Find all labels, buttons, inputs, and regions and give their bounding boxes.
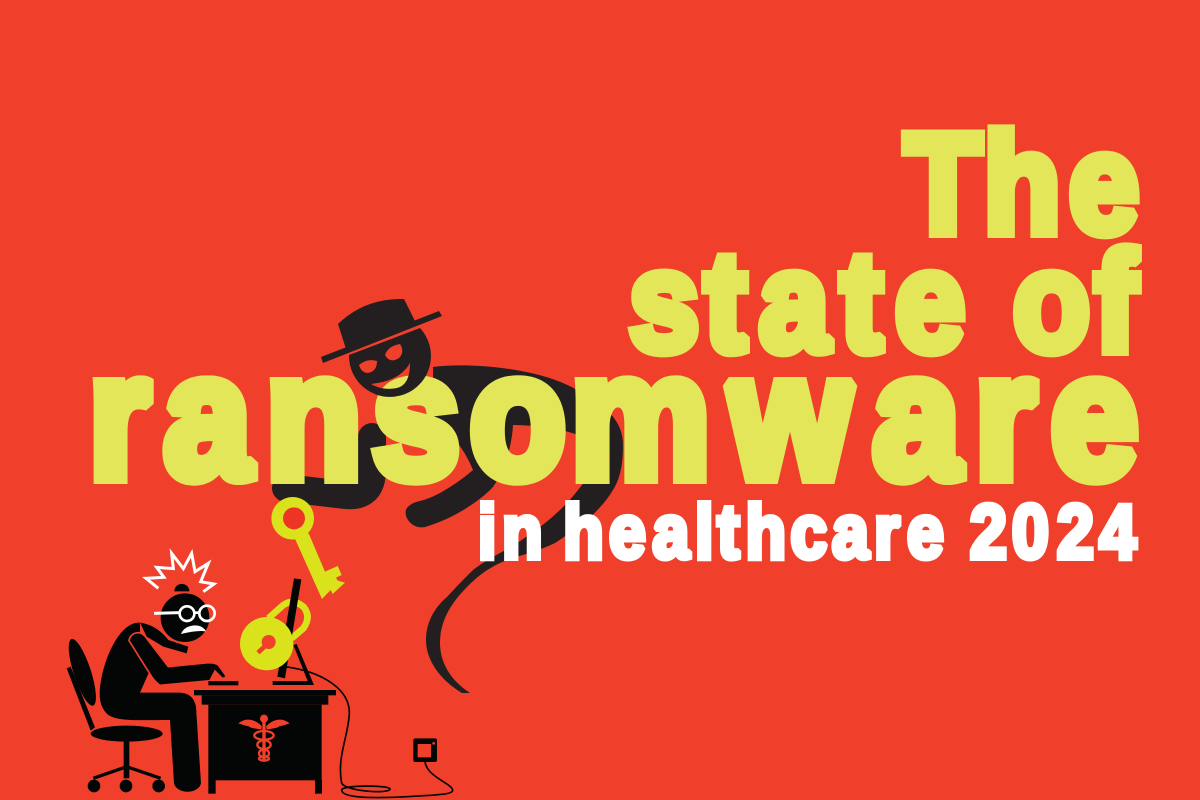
wall socket <box>413 738 437 762</box>
heading line: ransomware: ransomware <box>89 319 1138 515</box>
keyboard <box>208 681 238 685</box>
office worker scene <box>63 497 453 798</box>
title <box>89 105 1139 575</box>
thief head and hat <box>321 299 442 397</box>
arm with red outline <box>129 633 227 685</box>
head with bun <box>160 584 210 643</box>
hat brim <box>321 311 442 363</box>
glasses <box>154 606 215 621</box>
power cable <box>285 667 453 798</box>
frightened mouth <box>181 625 206 634</box>
computer monitor <box>273 578 314 685</box>
padlock shackle <box>268 602 307 638</box>
heading line: The: The <box>905 105 1139 263</box>
office chair <box>63 636 165 792</box>
medical caduceus emblem <box>238 715 290 761</box>
shock burst <box>146 553 214 592</box>
head with mask eyes and grin cut out <box>349 328 431 397</box>
subheading: in healthcare 2024: in healthcare 2024 <box>478 491 1136 575</box>
desk <box>194 690 336 794</box>
heading line: state of: state of <box>629 223 1137 381</box>
worker body <box>100 623 227 792</box>
key <box>271 497 345 599</box>
scarf at neck <box>140 623 188 653</box>
padlock body <box>240 617 293 670</box>
thief body behind the title <box>286 365 623 693</box>
hat crown <box>338 299 415 349</box>
thief arm holding key <box>286 437 372 495</box>
